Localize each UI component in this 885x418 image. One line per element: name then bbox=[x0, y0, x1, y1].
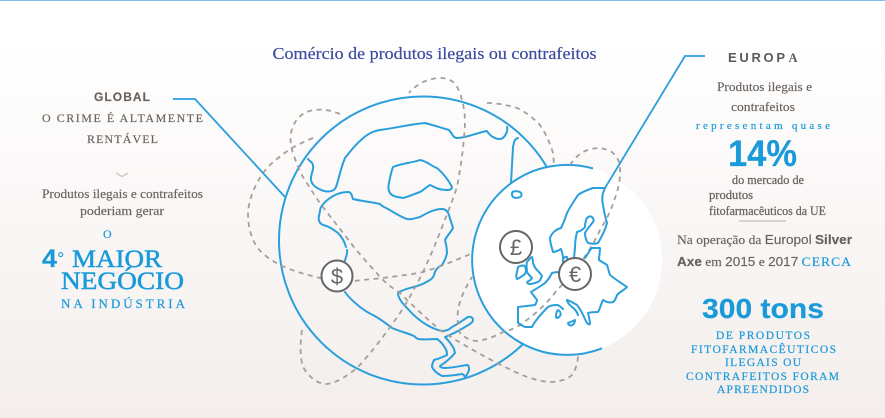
stat: 300 tons: 300 tons bbox=[702, 293, 824, 324]
divider bbox=[739, 220, 786, 222]
body text: contrafeitos: contrafeitos bbox=[731, 99, 795, 114]
panel: global bbox=[42, 90, 203, 311]
title: Comércio de produtos ilegais ou contrafeitos bbox=[272, 44, 596, 63]
chevron bbox=[116, 173, 128, 176]
icon: pound bbox=[500, 231, 532, 263]
heading: global: GLOBAL bbox=[94, 90, 151, 104]
subheading line 2: RENTÁVEL bbox=[87, 132, 158, 146]
body text: produtos ilegais e: Produtos ilegais e bbox=[717, 79, 812, 94]
callout: o: O bbox=[103, 227, 112, 241]
Europe coastline bbox=[512, 188, 627, 327]
subheading line 1: O CRIME É ALTAMENTE bbox=[42, 111, 203, 125]
callout: na industria: NA INDÚSTRIA bbox=[61, 296, 186, 311]
blue text: ilegais ou: ILEGAIS OU bbox=[725, 357, 802, 369]
Europe white circle bbox=[472, 165, 662, 355]
icon: dollar: $ bbox=[331, 264, 343, 289]
globe outline bbox=[279, 96, 567, 384]
body text line 2: poderiam gerar bbox=[80, 203, 165, 218]
body text: operation line 1: Na operação da Europol Silver bbox=[677, 232, 852, 247]
heading: last letter: A bbox=[788, 51, 798, 65]
callout: degree sign: ° bbox=[58, 250, 64, 267]
blue text: representam quase: representam quase bbox=[696, 120, 830, 132]
body text line 1: Produtos ilegais e contrafeitos bbox=[42, 186, 203, 201]
callout: negocio: NEGÓCIO bbox=[61, 267, 184, 295]
top rule bbox=[0, 0, 885, 1]
blue text: contrafeitos foram: CONTRAFEITOS FORAM bbox=[686, 371, 839, 383]
panel: europa bbox=[677, 50, 852, 396]
body text: do mercado de: do mercado de bbox=[732, 172, 804, 187]
blue text: fitofarmaceuticos: FITOFARMACÊUTICOS bbox=[691, 342, 836, 356]
icon: euro: € bbox=[569, 262, 581, 287]
body text: fitofarmaceuticos da UE: fitofarmacêuticos da UE bbox=[709, 203, 826, 218]
icon: pound: £ bbox=[510, 235, 522, 260]
blue text: de produtos: DE PRODUTOS bbox=[716, 330, 810, 342]
callout: 4: 4 bbox=[42, 245, 57, 273]
body text: produtos: produtos bbox=[709, 187, 753, 202]
callout: maior: MAIOR bbox=[72, 246, 162, 273]
dashed trade routes bbox=[248, 78, 620, 384]
body text: operation line 2: Axe em 2015 e 2017 CERCA bbox=[677, 254, 852, 269]
icon: euro bbox=[559, 258, 591, 290]
Americas coastline bbox=[308, 123, 518, 377]
stat: 14%: 14% bbox=[728, 133, 797, 174]
icon: dollar bbox=[322, 260, 352, 292]
leader line: europe bbox=[605, 56, 705, 188]
leader line: global bbox=[173, 99, 285, 197]
heading: europa: EUROP bbox=[728, 50, 787, 65]
Europe circle outline arc bbox=[472, 165, 602, 355]
blue text: apreendidos: APREENDIDOS bbox=[717, 384, 809, 396]
